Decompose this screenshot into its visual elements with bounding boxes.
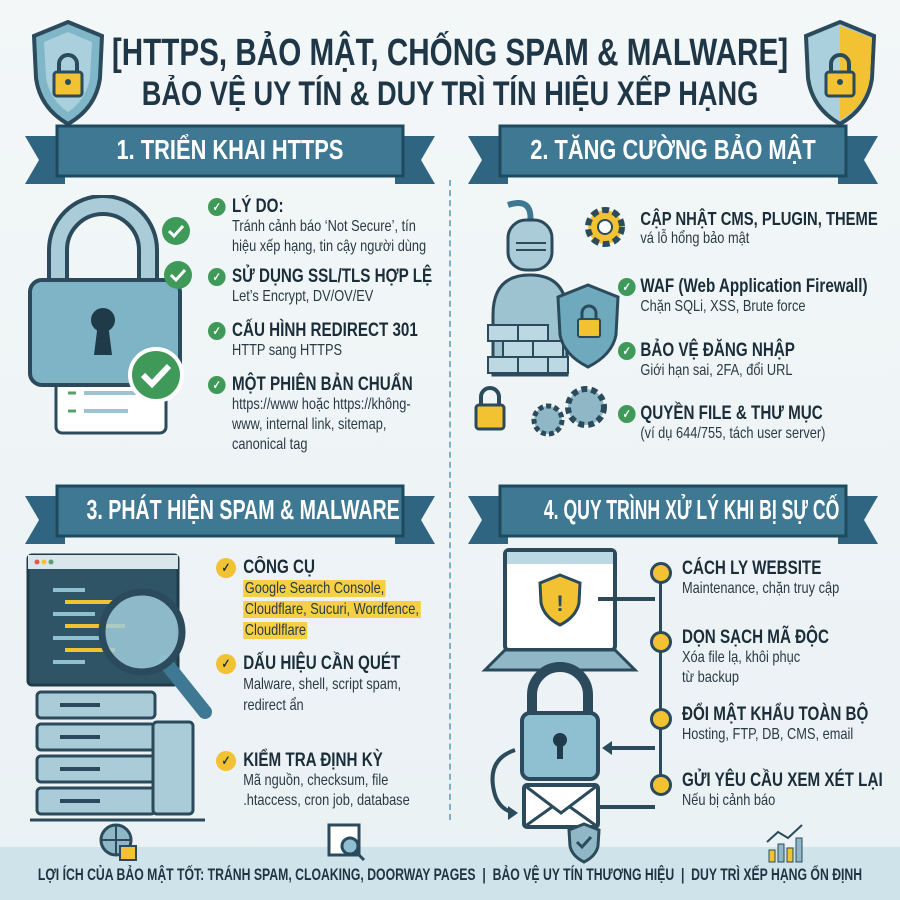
item: dang nhap: Giới hạn sai, 2FA, đổi URL <box>640 362 793 379</box>
icon: shield check <box>567 822 601 864</box>
icon: right title shield <box>804 20 876 124</box>
item: dau hieu: ✓ <box>222 656 230 671</box>
item: cap nhat <box>640 208 878 247</box>
step: cach ly: Maintenance, chặn truy cập <box>682 580 839 597</box>
item: kiem tra: Mã nguồn, checksum, file <box>243 772 388 789</box>
ribbon: section 3 <box>25 484 435 544</box>
divider <box>449 180 451 820</box>
icon: left title shield <box>32 20 104 124</box>
item: kiem tra: .htaccess, cron job, database <box>243 792 410 809</box>
item: dang nhap: ✓ <box>623 344 631 358</box>
item: ly do: ✓ <box>213 200 221 214</box>
item: dau hieu: DẤU HIỆU CẦN QUÉT <box>243 653 400 674</box>
item: ssl <box>208 264 432 305</box>
item: waf: Chặn SQLi, XSS, Brute force <box>640 298 805 315</box>
title: BẢO VỆ UY TÍN & DUY TRÌ TÍN HIỆU XẾP HẠNG <box>142 75 758 113</box>
item: kiem tra <box>216 748 410 809</box>
step: gui yeu cau: Nếu bị cảnh báo <box>682 792 775 809</box>
ribbon: section 2 <box>468 124 878 184</box>
item: waf: ✓ <box>623 280 631 294</box>
item: cong cu: CÔNG CỤ <box>243 557 315 578</box>
step: doi mat khau <box>682 702 868 743</box>
item: dang nhap: BẢO VỆ ĐĂNG NHẬP <box>640 340 795 361</box>
step: don sach: từ backup <box>682 669 739 686</box>
illustration: code window, magnifier, servers <box>26 554 212 822</box>
item: ly do: hiệu xếp hạng, tin cậy người dùng <box>232 238 426 255</box>
item: cong cu: Cloudflare, Sucuri, Wordfence, <box>245 601 419 618</box>
item: cong cu: Cloudlflare <box>245 622 306 639</box>
title: [HTTPS, BẢO MẬT, CHỐNG SPAM & MALWARE] <box>112 32 788 74</box>
icon: chart <box>766 824 803 862</box>
item: ly do <box>208 195 428 265</box>
item: cap nhat: vá lỗ hổng bảo mật <box>640 230 749 247</box>
item: dang nhap <box>618 338 795 379</box>
illustration: knight with shield and gears <box>474 200 620 436</box>
item: cong cu: ✓ <box>222 560 230 575</box>
section 1 list <box>208 195 432 453</box>
item: cap nhat: CẬP NHẬT CMS, PLUGIN, THEME <box>640 208 878 229</box>
ribbon: section 4: 4. QUY TRÌNH XỬ LÝ KHI BỊ SỰ CỐ <box>544 494 839 525</box>
item: kiem tra: KIỂM TRA ĐỊNH KỲ <box>243 750 383 771</box>
ribbon: section 2: 2. TĂNG CƯỜNG BẢO MẬT <box>530 134 816 165</box>
item: ssl: ✓ <box>213 270 221 284</box>
item: cong cu: Google Search Console, <box>245 580 384 597</box>
title <box>112 30 788 113</box>
step: doi mat khau: Hosting, FTP, DB, CMS, email <box>682 726 853 743</box>
timeline line <box>659 570 662 785</box>
section 2 list <box>618 208 878 442</box>
item: cong cu <box>216 556 421 652</box>
footer text: LỢI ÍCH CỦA BẢO MẬT TỐT: TRÁNH SPAM, CLOAKING, DOORWAY PAGES | BẢO VỆ UY TÍN THƯƠNG HIỆU | DUY TRÌ XẾP HẠNG ỔN ĐỊNH <box>38 865 862 884</box>
step: gui yeu cau <box>682 768 883 809</box>
item: ly do: Tránh cảnh báo ‘Not Secure’, tín <box>232 218 416 235</box>
item: redirect: ✓ <box>213 324 221 338</box>
step: cach ly <box>682 557 839 626</box>
item: phien ban: ✓ <box>213 378 221 392</box>
item: waf <box>618 276 868 315</box>
item: quyen file: QUYỀN FILE & THƯ MỤC <box>640 403 823 424</box>
item: quyen file: (ví dụ 644/755, tách user server) <box>640 425 825 442</box>
step: doi mat khau: ĐỔI MẬT KHẨU TOÀN BỘ <box>682 704 868 725</box>
item: dau hieu: redirect ẩn <box>243 697 304 714</box>
item: waf: WAF (Web Application Firewall) <box>640 276 868 297</box>
item: ly do: LÝ DO: <box>232 196 284 217</box>
item: redirect: HTTP sang HTTPS <box>232 342 342 359</box>
item: redirect <box>208 318 418 359</box>
step: don sach: Xóa file lạ, khôi phục <box>682 649 800 666</box>
ribbon: section 3: 3. PHÁT HIỆN SPAM & MALWARE <box>86 494 400 525</box>
icon: search page <box>328 824 365 861</box>
section 3 list <box>216 556 421 809</box>
section 4 steps <box>682 557 883 809</box>
illustration: padlock with checks <box>28 195 192 434</box>
item: ssl: SỬ DỤNG SSL/TLS HỢP LỆ <box>232 266 432 287</box>
item: phien ban: https://www hoặc https://không- <box>232 396 411 413</box>
item: quyen file <box>618 402 825 442</box>
ribbon: section 1: 1. TRIỂN KHAI HTTPS <box>117 134 343 165</box>
item: quyen file: ✓ <box>623 407 631 421</box>
ribbon: section 1 <box>25 124 435 184</box>
icon: globe lock <box>100 824 137 861</box>
item: phien ban: www, internal link, sitemap, <box>232 416 386 433</box>
illustration: laptop, lock, envelope: ! <box>556 591 564 616</box>
item: ssl: Let’s Encrypt, DV/OV/EV <box>232 288 373 305</box>
step: cach ly: CÁCH LY WEBSITE <box>682 558 821 579</box>
item: dau hieu <box>216 652 401 714</box>
item: dau hieu: Malware, shell, script spam, <box>243 676 401 693</box>
item: kiem tra: ✓ <box>222 753 230 768</box>
item: phien ban: canonical tag <box>232 436 307 453</box>
illustration: laptop, lock, envelope <box>482 548 655 829</box>
item: phien ban: MỘT PHIÊN BẢN CHUẨN <box>232 374 413 395</box>
item: phien ban <box>208 372 413 453</box>
step: don sach <box>682 625 829 686</box>
timeline dots <box>650 562 672 796</box>
step: gui yeu cau: GỬI YÊU CẦU XEM XÉT LẠI <box>682 770 883 791</box>
item: redirect: CẤU HÌNH REDIRECT 301 <box>232 320 418 341</box>
step: don sach: DỌN SẠCH MÃ ĐỘC <box>682 627 829 648</box>
footer band <box>0 847 900 900</box>
icon: gear <box>585 207 625 247</box>
ribbon: section 4 <box>468 484 878 544</box>
